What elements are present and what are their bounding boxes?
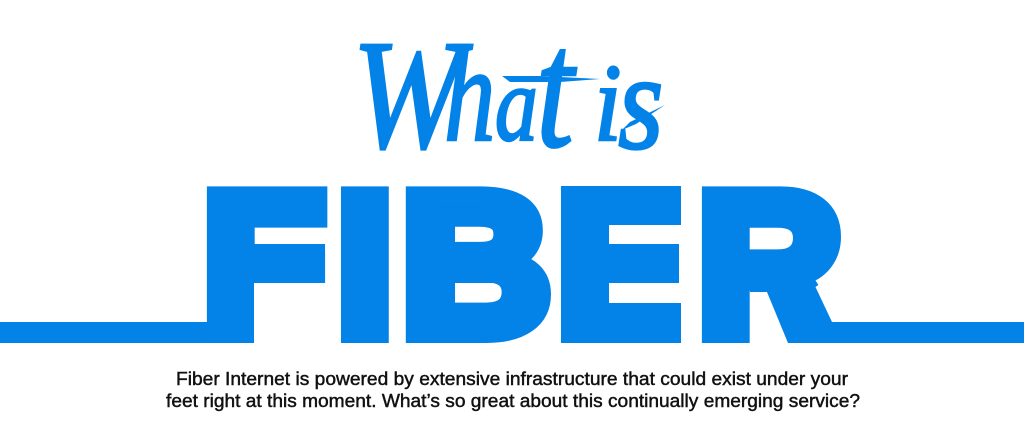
- heading: FIBER: B: [402, 153, 551, 377]
- script heading: What is: t: [536, 0, 577, 184]
- script heading: What is: a: [495, 45, 538, 163]
- script heading: What is: i: [594, 42, 622, 164]
- script heading: What is: W: [352, 9, 473, 181]
- heading: FIBER: I: [337, 154, 393, 376]
- heading: FIBER: R: [698, 154, 842, 376]
- intro paragraph: feet right at this moment. What’s so great about this continually emerging service?: [166, 391, 860, 411]
- script heading: What is: h: [444, 19, 495, 171]
- script heading: What is: s: [618, 25, 664, 178]
- heading: FIBER: E: [557, 152, 680, 376]
- script heading: What is: [352, 0, 665, 184]
- intro paragraph: [166, 369, 860, 411]
- intro paragraph: Fiber Internet is powered by extensive infrastructure that could exist under your: [176, 369, 848, 389]
- heading: FIBER: F: [203, 154, 325, 376]
- right fiber line: [800, 322, 1024, 343]
- letterform refinements: [254, 186, 852, 346]
- left fiber line: [0, 322, 215, 343]
- heading: FIBER: [203, 152, 842, 377]
